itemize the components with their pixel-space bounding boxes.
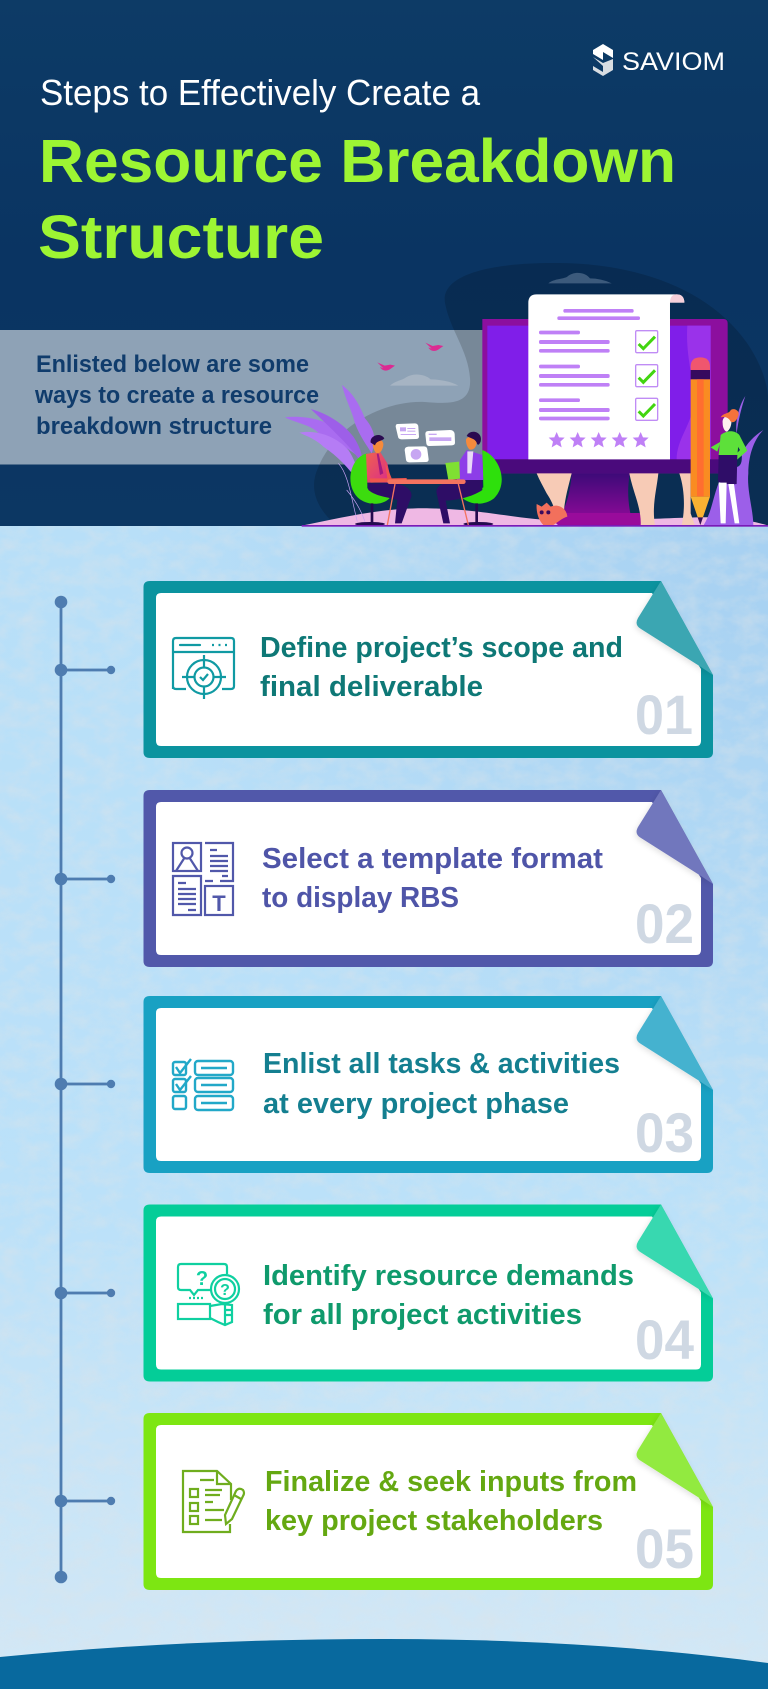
heading: subtitle: Steps to Effectively Create a — [40, 72, 481, 113]
panel: step 2 card — [144, 790, 713, 967]
step 2 text — [262, 843, 603, 914]
step 3 text: at every project phase — [263, 1088, 569, 1120]
text block: intro: Enlisted below are some — [36, 351, 309, 378]
person left — [366, 435, 412, 523]
step 4 text: Identify resource demands — [263, 1260, 634, 1292]
step 1 text — [260, 632, 623, 703]
document with checklist — [528, 294, 684, 459]
panel: step 5 card — [144, 1413, 713, 1590]
step 5 text: Finalize & seek inputs from — [265, 1466, 637, 1498]
text block: intro: ways to create a resource — [34, 382, 319, 409]
step number 03: 03 — [635, 1101, 694, 1164]
bottom curved footer band — [0, 1639, 768, 1689]
step number 04: 04 — [635, 1308, 694, 1371]
timeline — [55, 596, 115, 1583]
chair left — [350, 453, 390, 526]
step 2 text: Select a template format — [262, 843, 603, 875]
pencil — [691, 357, 710, 525]
icon: Saviom S mark — [593, 44, 613, 76]
icon: question and magnifier — [178, 1264, 239, 1325]
ground — [302, 508, 768, 526]
checkboxes — [636, 331, 658, 420]
icon: template layouts: T — [212, 891, 226, 916]
title: Resource Breakdown — [39, 127, 676, 195]
raccoon — [537, 503, 567, 525]
panel: step 1 card — [144, 581, 713, 758]
title: Structure — [38, 203, 324, 271]
text block: intro — [34, 351, 319, 440]
icon: question and magnifier: ? — [220, 1282, 230, 1299]
monitor — [482, 319, 728, 526]
hands under monitor — [537, 473, 695, 526]
icon: template layouts — [173, 843, 233, 916]
birds — [377, 343, 443, 371]
step 4 text: for all project activities — [263, 1299, 582, 1331]
timeline branch 1 — [55, 664, 115, 676]
icon: browser window with target — [173, 638, 234, 699]
timeline branch 3 — [55, 1078, 115, 1090]
panel: header — [0, 0, 768, 527]
panel: textured light background — [0, 526, 768, 1689]
clouds — [390, 273, 612, 386]
step 5 text: key project stakeholders — [265, 1505, 603, 1537]
ground line — [302, 525, 768, 527]
intro text band background — [0, 330, 484, 464]
icon: task checklist — [173, 1059, 233, 1110]
icon: question and magnifier: ? — [196, 1268, 208, 1290]
step 3 text — [263, 1048, 620, 1120]
dark blob behind illustration — [314, 263, 768, 526]
step 1 text: final deliverable — [260, 671, 483, 703]
panel: step 4 card — [144, 1204, 713, 1382]
idea bubbles — [396, 423, 455, 462]
logo: Saviom — [593, 44, 725, 76]
table — [387, 479, 468, 525]
step 1 text: Define project’s scope and — [260, 632, 623, 664]
chair right — [462, 450, 502, 526]
step number 01: 01 — [635, 683, 693, 746]
step number 05: 05 — [635, 1517, 694, 1580]
step 2 text: to display RBS — [262, 882, 459, 914]
step 3 text: Enlist all tasks & activities — [263, 1048, 620, 1080]
right plant — [703, 396, 763, 526]
woman standing — [711, 409, 747, 523]
rating stars — [549, 432, 649, 447]
step 4 text — [263, 1260, 634, 1331]
left plant — [285, 385, 374, 480]
title — [38, 127, 676, 271]
timeline branch 2 — [55, 873, 115, 885]
panel: step 3 card — [144, 996, 713, 1173]
logo wordmark: SAVIOM — [622, 48, 725, 76]
timeline branch 5 — [55, 1495, 115, 1507]
text block: intro: breakdown structure — [36, 413, 272, 440]
person right — [436, 432, 483, 523]
step number 02: 02 — [635, 892, 694, 955]
icon: document and pencil — [183, 1471, 244, 1532]
step 5 text — [265, 1466, 637, 1537]
illustration: team meeting and checklist on monitor — [285, 273, 768, 527]
timeline branch 4 — [55, 1287, 115, 1299]
